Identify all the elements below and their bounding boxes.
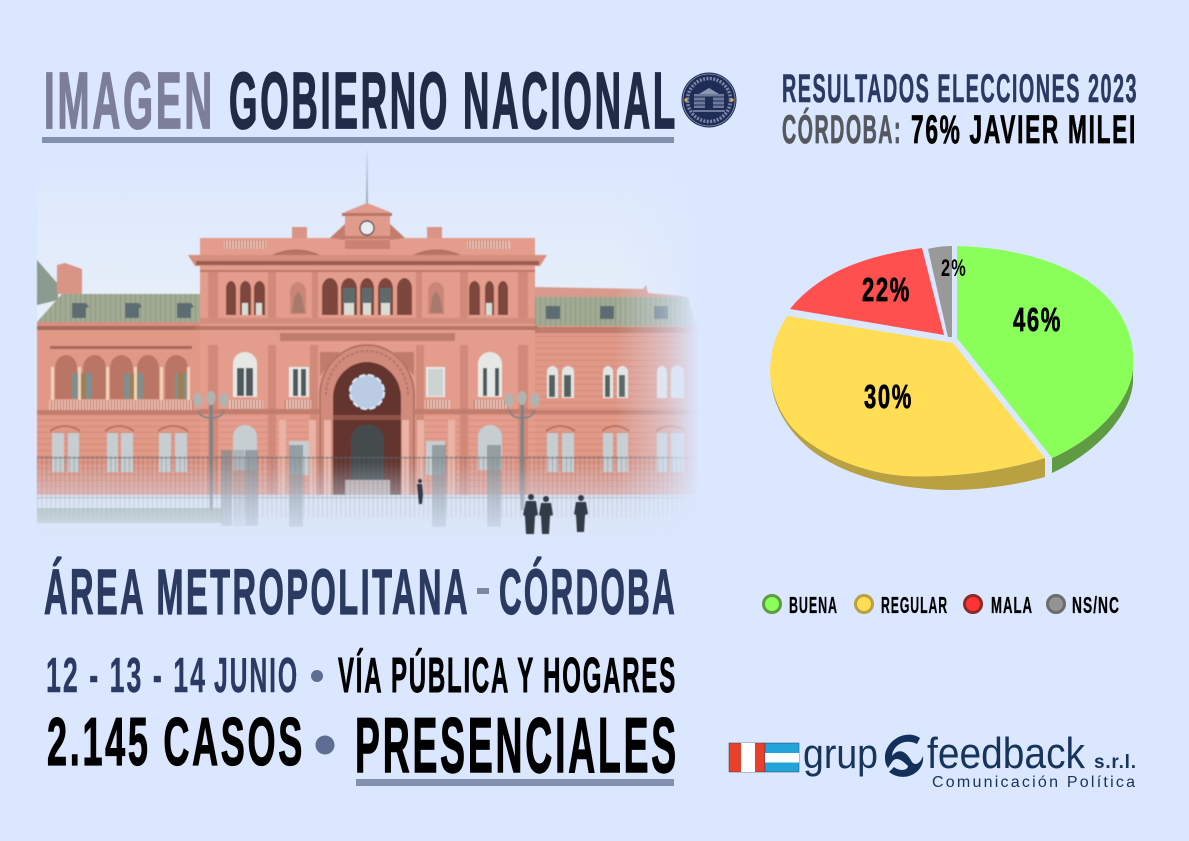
value labels xyxy=(862,255,1062,415)
upper arched windows xyxy=(226,278,508,315)
infographic canvas: PRESENCIALES xyxy=(355,701,679,789)
text: dates and survey place: 12 - 13 - 14 xyxy=(46,649,207,703)
slice: ns/nc 2% xyxy=(928,246,952,337)
side wings xyxy=(37,322,202,497)
ground floor windows xyxy=(52,425,684,475)
logo: Grupo Feedback: s.r.l. xyxy=(1094,752,1136,773)
logo: Grupo Feedback: Comunicación Política xyxy=(932,774,1135,791)
legend: NS/NC xyxy=(1072,592,1120,618)
fence base and pavement xyxy=(37,495,697,540)
right wing windows xyxy=(547,366,684,398)
photo: Casa Rosada government palace xyxy=(35,145,703,545)
balconies xyxy=(229,400,508,409)
central arch xyxy=(320,345,414,500)
flagpole xyxy=(366,150,368,205)
legend: BUENA xyxy=(789,592,838,618)
slice: buena 46% xyxy=(957,246,1133,458)
value labels: 2% xyxy=(941,255,967,282)
left arcade xyxy=(55,355,188,399)
main cornice xyxy=(188,255,547,266)
title: Imagen Gobierno Nacional: IMAGEN xyxy=(44,56,215,145)
value labels: 30% xyxy=(864,378,913,415)
icon: swirl xyxy=(885,735,923,777)
title: Imagen Gobierno Nacional xyxy=(42,56,678,145)
logo: Grupo Feedback: feedback xyxy=(927,729,1086,778)
slice: mala 22% xyxy=(790,248,944,335)
text: dates and survey place: JUNIO xyxy=(214,649,299,703)
slice: green side wall xyxy=(1052,368,1133,473)
logo: Grupo Feedback: grup xyxy=(803,730,878,777)
fence xyxy=(37,456,697,518)
statues xyxy=(290,282,306,314)
legend: MALA xyxy=(991,592,1033,618)
ornate spandrels xyxy=(320,352,414,376)
first-floor windows xyxy=(233,352,502,397)
columns xyxy=(309,420,316,498)
image fades xyxy=(37,145,697,205)
value labels: 22% xyxy=(862,271,911,308)
heading: metropolitan area: ÁREA METROPOLITANA xyxy=(44,556,470,628)
slice: regular 30% xyxy=(770,316,1045,476)
fence piers xyxy=(221,445,501,527)
legend xyxy=(764,592,1120,618)
heading: election results 2023: CÓRDOBA: xyxy=(782,106,902,152)
value labels: 46% xyxy=(1013,301,1062,338)
slice: yellow side wall xyxy=(771,365,1045,490)
infographic canvas: VÍA PÚBLICA Y HOGARES xyxy=(338,648,677,703)
legend: REGULAR xyxy=(881,592,948,618)
clock xyxy=(360,221,374,235)
icon: Peru and Argentina flags xyxy=(729,743,799,772)
text: sample size and method xyxy=(47,701,679,789)
people in front of the fence xyxy=(417,479,588,534)
text: dates and survey place xyxy=(46,648,677,703)
infographic canvas: CÓRDOBA xyxy=(499,556,677,628)
text: sample size and method: 2.145 CASOS xyxy=(47,704,305,780)
sun medallion xyxy=(350,375,384,409)
infographic canvas: GOBIERNO NACIONAL xyxy=(229,56,678,145)
lamp posts xyxy=(198,400,535,510)
central block xyxy=(200,238,535,500)
chart: 3D pie of government image xyxy=(770,246,1133,490)
pilasters xyxy=(208,272,528,495)
icon: national seal xyxy=(682,72,736,128)
logo: Grupo Feedback xyxy=(729,729,1136,791)
heading: election results 2023 xyxy=(782,67,1138,152)
